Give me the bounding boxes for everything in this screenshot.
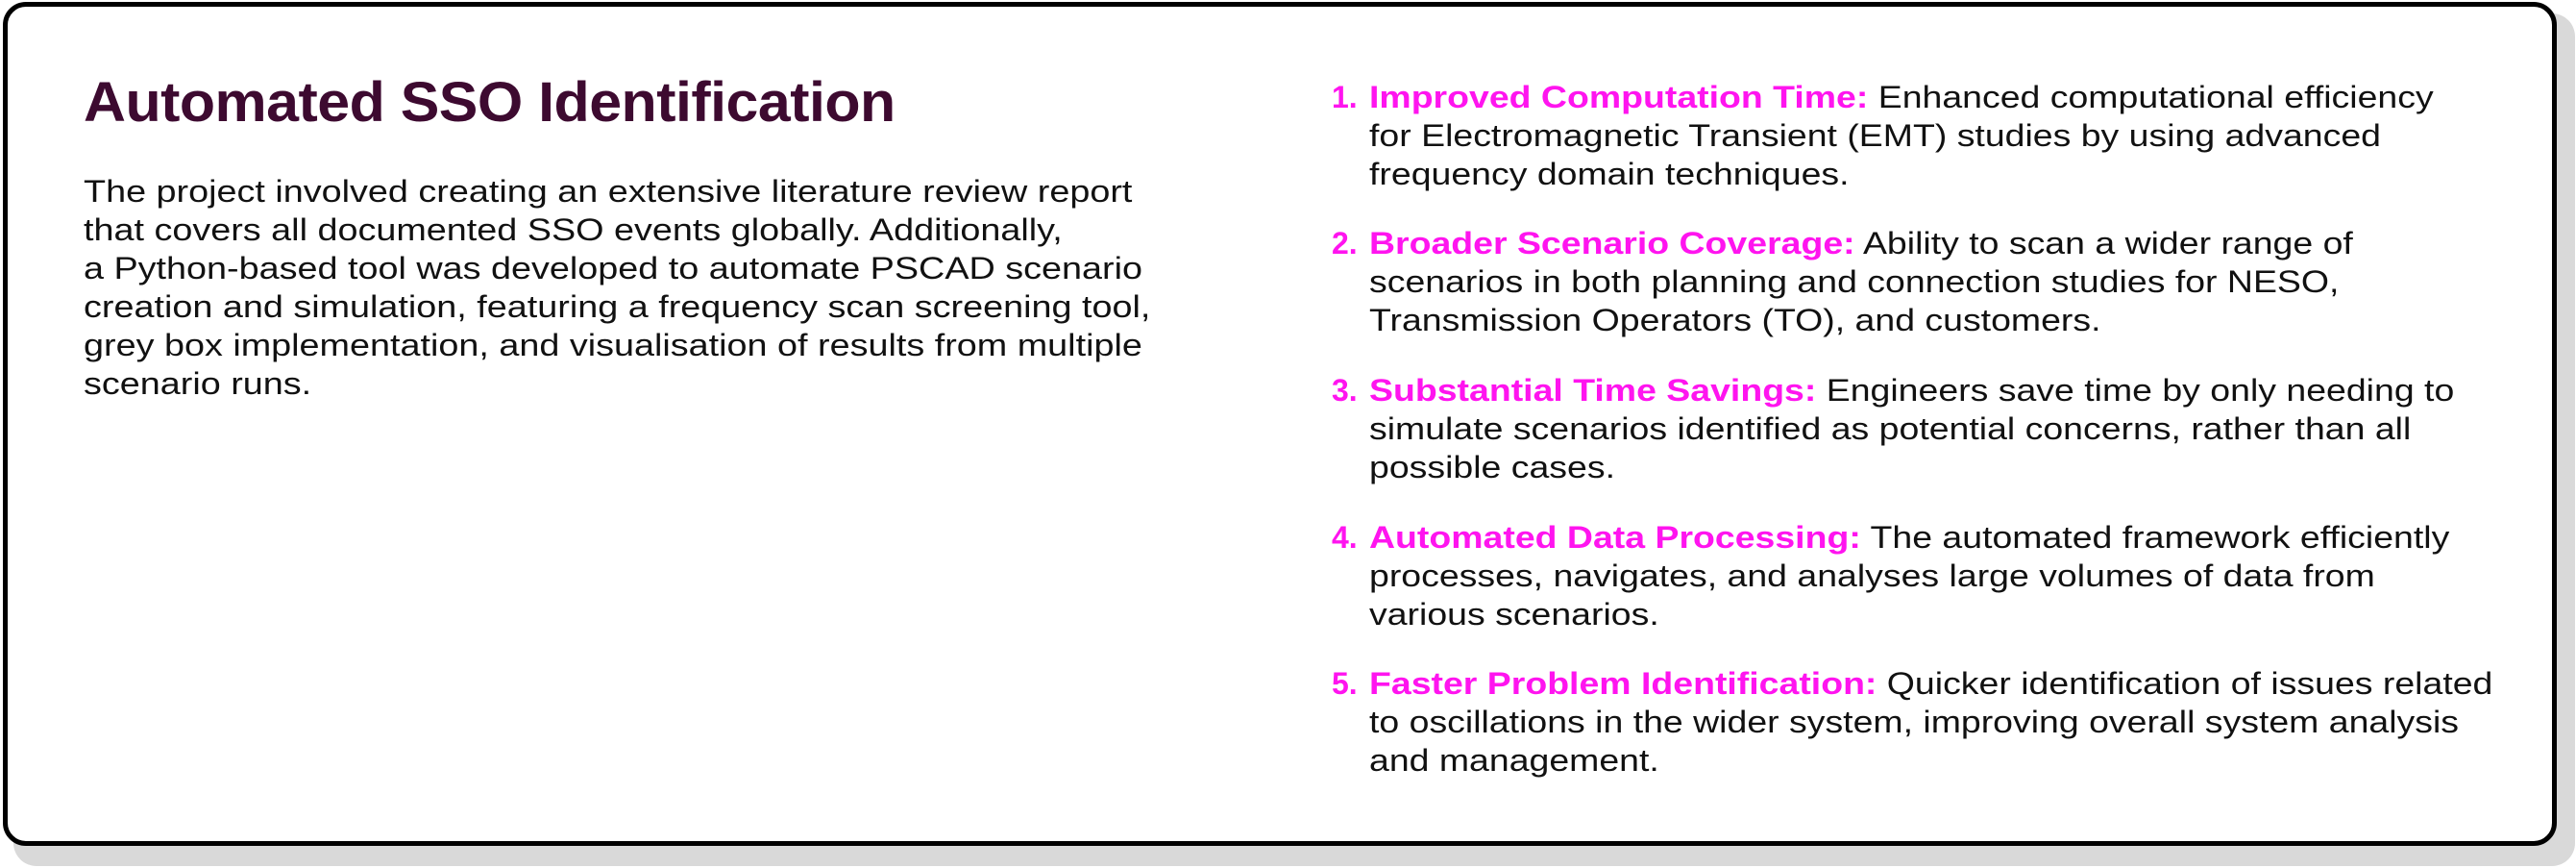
text block: description: that covers all documented SSO events globally. Additionally, <box>84 212 1063 247</box>
list item 5: to oscillations in the wider system, improving overall system analysis <box>1369 705 2459 739</box>
list item 5: and management. <box>1369 743 1659 778</box>
list item 3: 3. <box>1332 373 1358 408</box>
list item 3: Substantial Time Savings: Engineers save time by only needing to <box>1369 373 2454 408</box>
list item 3: possible cases. <box>1369 450 1615 484</box>
list item 5: 5. <box>1332 666 1358 701</box>
list item 5: Faster Problem Identification: Quicker identification of issues related <box>1369 666 2492 701</box>
list item 5 <box>1332 666 2492 778</box>
list item 1: frequency domain techniques. <box>1369 157 1850 191</box>
text block: description: a Python-based tool was developed to automate PSCAD scenario <box>84 251 1142 285</box>
list item 1 <box>1332 80 2434 191</box>
list item 1: Improved Computation Time: Enhanced computational efficiency <box>1369 80 2434 114</box>
list item 4: Automated Data Processing: The automated framework efficiently <box>1369 520 2449 555</box>
list item 4 <box>1332 520 2450 632</box>
title: Automated SSO Identification <box>84 71 895 134</box>
list item 2: scenarios in both planning and connection studies for NESO, <box>1369 264 2339 299</box>
text block: description: creation and simulation, featuring a frequency scan screening tool, <box>84 289 1150 324</box>
list item 2: 2. <box>1332 226 1358 260</box>
list item 4: various scenarios. <box>1369 597 1659 632</box>
list item 4: 4. <box>1332 520 1358 555</box>
list item 4: processes, navigates, and analyses large volumes of data from <box>1369 558 2375 593</box>
list item 2: Transmission Operators (TO), and customers. <box>1369 303 2101 337</box>
text block: description: scenario runs. <box>84 366 311 401</box>
list item 2: Broader Scenario Coverage: Ability to scan a wider range of <box>1369 226 2353 260</box>
text block: description: grey box implementation, and visualisation of results from multiple <box>84 328 1142 362</box>
text block: description <box>84 174 1150 401</box>
list item 2 <box>1332 226 2353 337</box>
text block: description: The project involved creating an extensive literature review report <box>84 174 1132 209</box>
list item 3: simulate scenarios identified as potential concerns, rather than all <box>1369 411 2411 446</box>
list item 3 <box>1332 373 2454 484</box>
list item 1: for Electromagnetic Transient (EMT) studies by using advanced <box>1369 118 2381 153</box>
list item 1: 1. <box>1332 80 1358 114</box>
